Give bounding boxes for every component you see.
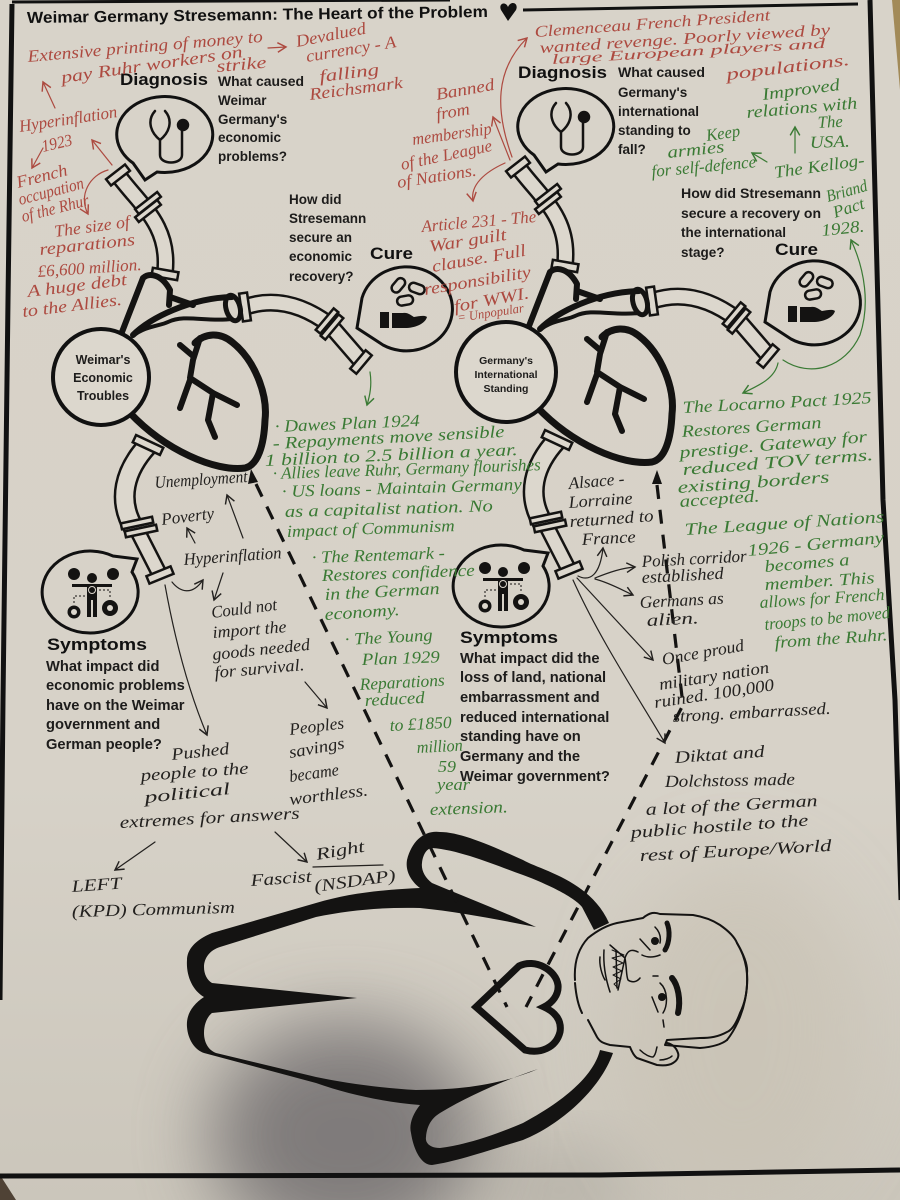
black notes: left symptoms: worthless. (288, 780, 369, 809)
black notes: right symptoms: Polish corridor (640, 547, 747, 571)
right diagnosis text: fall? (618, 142, 646, 157)
green notes: left cure: · US loans - Maintain Germany (282, 475, 523, 501)
right cure question: stage? (681, 245, 725, 260)
left diagnosis text: problems? (218, 149, 287, 164)
green notes: right cure: prestige. Gateway for (677, 427, 868, 462)
title: Weimar Germany Stresemann: The Heart of the Problem (27, 4, 488, 27)
red notes: left diagnosis (13, 19, 404, 321)
green notes: right cure: Keep (704, 121, 741, 145)
Stresemann figure body (187, 832, 613, 1165)
green notes: left cure: extension. (429, 797, 508, 819)
green notes: right cure: becomes a (764, 550, 850, 576)
right heart label: Germany's (479, 355, 533, 367)
right diagnosis text (518, 64, 705, 157)
Stresemann head (575, 913, 747, 1065)
red notes: left diagnosis: Devalued (293, 19, 368, 51)
green notes: left cure: impact of Communism (286, 516, 455, 541)
red notes: right diagnosis: responsibility (423, 262, 533, 299)
green notes: right cure: Restores German (680, 413, 822, 441)
green notes: right cure: The Kellog- (773, 150, 866, 182)
right heart (529, 269, 672, 462)
left heart label (53, 329, 149, 425)
black notes: right symptoms: France (580, 527, 637, 549)
left diagnosis bubble (117, 96, 213, 180)
black notes: right symptoms: Dolchstoss made (664, 770, 796, 791)
green notes: left cure: to £1850 (389, 713, 453, 735)
left symptoms text: Symptoms (47, 636, 147, 654)
red notes: left diagnosis: strike (216, 53, 268, 76)
black notes: left symptoms: Poverty (159, 504, 216, 529)
title rule (523, 4, 858, 10)
left diagnosis text: economic (218, 130, 282, 145)
right symptoms text: Weimar government? (460, 769, 610, 785)
left cure question: How did (289, 192, 342, 207)
dashed connector right (526, 470, 683, 1007)
green notes: right cure: Improved (760, 75, 841, 104)
black notes: left symptoms: savings (287, 733, 346, 762)
red notes: left diagnosis: 1923 (40, 130, 74, 156)
left symptoms text: economic problems (46, 678, 185, 694)
black notes: right symptoms: military nation (658, 658, 770, 694)
green notes: right cure: relations with (746, 93, 858, 122)
right cure question: How did Stresemann (681, 186, 821, 201)
green notes: left cure: economy. (324, 600, 400, 624)
green notes: right cure: reduced TOV terms. (682, 445, 874, 479)
left cure question: Cure (370, 245, 413, 263)
green notes: right cure: 1928. (820, 217, 865, 240)
red notes: right diagnosis: Banned (434, 75, 496, 104)
green notes: left cure: · Allies leave Ruhr, Germany flourishes (273, 455, 541, 483)
right symptoms text: standing have on (460, 729, 581, 745)
green notes: left cure: 1 billion to 2.5 billion a year. (264, 440, 518, 470)
green notes: left cure: reduced (364, 688, 426, 710)
right symptoms text: What impact did the (460, 651, 600, 667)
arrows: red annotations (32, 38, 527, 214)
arrows: black annotations (115, 495, 665, 870)
right heart label: International (474, 369, 538, 381)
right heart label: Standing (484, 383, 528, 395)
right symptoms text: Germany and the (460, 749, 580, 765)
green notes: left cure: as a capitalist nation. No (285, 496, 493, 521)
red notes: left diagnosis: £6,600 million. (37, 255, 142, 281)
black notes: left symptoms: extremes for answers (119, 804, 300, 832)
left tubes (106, 164, 372, 584)
red notes: left diagnosis: A huge debt (25, 270, 129, 301)
left cure question: secure an (289, 230, 352, 245)
green notes: right cure: troops to be moved (764, 603, 891, 634)
right symptoms text (460, 629, 610, 785)
right diagnosis text: What caused (618, 65, 705, 80)
black notes: left symptoms: political (142, 779, 231, 807)
red notes: right diagnosis: clause. Full (430, 241, 528, 276)
green notes: left cure: in the German (324, 579, 440, 604)
green notes: right cure: The Locarno Pact 1925 (682, 388, 872, 417)
red notes: right diagnosis: wanted revenge. Poorly viewed by (539, 22, 832, 57)
green notes: right cure: from the Ruhr. (774, 625, 888, 652)
black notes: left symptoms: (KPD) Communism (72, 898, 235, 921)
red notes: right diagnosis: large European players and (551, 37, 827, 68)
left diagnosis text: Diagnosis (120, 71, 208, 89)
black notes: right symptoms: ruined. 100,000 (653, 675, 776, 712)
red notes: right diagnosis: populations. (724, 50, 851, 84)
arrows: green annotations (367, 127, 865, 405)
red notes: left diagnosis: The size of (53, 212, 133, 241)
black notes: right symptoms (567, 469, 833, 865)
green notes: right cure: existing borders (677, 467, 830, 497)
red notes: left diagnosis: occupation (16, 173, 86, 209)
red notes: left diagnosis: Extensive printing of money to (26, 27, 263, 66)
green notes: right cure: accepted. (679, 486, 760, 511)
black notes: left symptoms: Unemployment (154, 467, 249, 492)
black notes: left symptoms: Right (313, 836, 368, 864)
red notes: right diagnosis: from (434, 99, 471, 124)
green notes: right cure: armies (666, 137, 726, 162)
left cure question (289, 192, 413, 284)
red notes: left diagnosis: pay Ruhr workers on (59, 42, 244, 87)
red notes: left diagnosis: Hyperinflation (17, 102, 118, 136)
right symptoms text: Symptoms (460, 629, 558, 647)
green notes: right cure: member. This (764, 568, 875, 594)
small heart on body (476, 963, 560, 1051)
green notes: left cure: 59 (438, 757, 457, 776)
red notes: right diagnosis: Clemenceau French President (534, 7, 771, 41)
left cure question: economic (289, 249, 353, 264)
green notes: right cure: for self-defence (651, 152, 757, 181)
black notes: left symptoms: became (288, 760, 340, 786)
red notes: left diagnosis: currency - A (305, 32, 398, 66)
right tubes (506, 156, 779, 579)
left symptoms text (46, 636, 185, 753)
left heart (122, 275, 265, 468)
right diagnosis text: Germany's (618, 85, 687, 100)
red notes: right diagnosis (396, 7, 851, 325)
left heart label: Weimar's (76, 353, 130, 367)
black notes: right symptoms: rest of Europe/World (639, 836, 833, 865)
red notes: left diagnosis: falling (318, 60, 380, 86)
red notes: right diagnosis: = Unpopular (456, 300, 526, 325)
left symptoms text: What impact did (46, 659, 159, 675)
black notes: right symptoms: Alsace - (567, 469, 625, 493)
left diagnosis text: What caused (218, 74, 304, 89)
right symptoms text: loss of land, national (460, 670, 606, 686)
green notes: left cure: year (435, 775, 470, 794)
black notes: left symptoms: (NSDAP) (313, 866, 397, 896)
green notes: left cure: Plan 1929 (360, 647, 441, 669)
green notes: left cure: Restores confidence (320, 561, 476, 585)
black notes: left symptoms: import the (212, 617, 288, 642)
red notes: right diagnosis: membership (411, 119, 493, 149)
green notes: left cure: million (416, 736, 463, 757)
red notes: left diagnosis: to the Allies. (21, 290, 123, 321)
right cure bubble (765, 261, 860, 345)
panel: left heart economic troubles (42, 71, 452, 753)
left cure bubble (357, 267, 452, 351)
green notes: right cure: The League of Nations (684, 507, 885, 539)
right heart label (456, 322, 556, 422)
red notes: left diagnosis: French (13, 160, 69, 192)
black notes: right symptoms: public hostile to the (629, 811, 809, 842)
green notes: left cure: · Dawes Plan 1924 (274, 411, 421, 436)
black notes: left symptoms (70, 467, 397, 921)
dashed connector left (248, 469, 507, 1007)
red notes: right diagnosis: of the League (399, 136, 494, 174)
green notes: left cure: Reparations (358, 671, 445, 694)
black notes: left symptoms: goods needed (211, 635, 311, 664)
left symptoms text: German people? (46, 737, 162, 753)
red notes: right diagnosis: War guilt (428, 225, 509, 256)
red notes: right diagnosis: of Nations. (396, 161, 478, 192)
right cure question: the international (681, 225, 786, 240)
left symptoms text: government and (46, 717, 160, 733)
left cure question: Stresemann (289, 211, 366, 226)
black notes: left symptoms: Could not (210, 595, 279, 622)
right cure question: secure a recovery on (681, 206, 821, 221)
green notes: left cure (264, 411, 541, 819)
left diagnosis text (120, 71, 304, 164)
right diagnosis text: standing to (618, 123, 691, 138)
left diagnosis text: Germany's (218, 112, 287, 127)
panel: right heart international standing (453, 64, 860, 785)
left symptoms text: have on the Weimar (46, 698, 185, 714)
black notes: left symptoms: for survival. (214, 655, 305, 682)
green notes: right cure: Pact (829, 193, 868, 222)
left symptoms bubble (42, 551, 138, 633)
icon: title heart (500, 3, 517, 21)
green notes: left cure: · The Rentemark - (311, 543, 445, 567)
black notes: right symptoms: Once proud (660, 636, 746, 669)
red notes: left diagnosis: Reichsmark (307, 73, 404, 104)
red notes: right diagnosis: Article 231 - The (420, 207, 537, 236)
left heart label: Troubles (77, 389, 129, 403)
right symptoms text: embarrassment and (460, 690, 600, 706)
black notes: left symptoms: Hyperinflation (182, 543, 282, 569)
black notes: right symptoms: Lorraine (567, 489, 634, 512)
red notes: left diagnosis: reparations (38, 230, 136, 259)
black notes: right symptoms: established (641, 564, 725, 587)
right diagnosis bubble (518, 88, 614, 172)
left diagnosis text: Weimar (218, 93, 267, 108)
black notes: left symptoms: Pushed (169, 739, 231, 764)
green notes: left cure: - Repayments move sensible (272, 422, 505, 453)
black notes: right symptoms: alien. (646, 608, 699, 630)
green notes: right cure: allows for French (759, 585, 885, 612)
right diagnosis text: international (618, 104, 699, 119)
green notes: right cure: The (817, 112, 844, 132)
green notes: right cure: USA. (809, 132, 850, 152)
black notes: right symptoms: returned to (569, 506, 654, 531)
black notes: left symptoms: people to the (139, 758, 250, 785)
green notes: right cure: Briand (824, 176, 870, 206)
right symptoms bubble (453, 545, 549, 627)
right cure question (681, 186, 821, 260)
left cure question: recovery? (289, 269, 354, 284)
green notes: right cure (651, 75, 891, 652)
black notes: right symptoms: Germans as (639, 589, 724, 612)
right symptoms text: reduced international (460, 710, 609, 726)
red notes: left diagnosis: of the Rhur (19, 190, 91, 226)
black notes: right symptoms: strong. embarrassed. (672, 699, 831, 726)
black notes: right symptoms: Diktat and (673, 742, 766, 767)
red notes: right diagnosis: for WWI. (452, 283, 530, 316)
right diagnosis text: Diagnosis (518, 64, 607, 82)
black notes: left symptoms: Peoples (287, 713, 345, 739)
green notes: right cure: 1926 - Germany (747, 528, 885, 560)
black notes: right symptoms: a lot of the German (645, 791, 818, 819)
black notes: left symptoms: LEFT (70, 873, 124, 896)
left heart label: Economic (73, 371, 133, 385)
black notes: left symptoms: Fascist (249, 867, 314, 890)
green notes: left cure: · The Young (344, 625, 433, 649)
right cure question: Cure (775, 241, 818, 259)
